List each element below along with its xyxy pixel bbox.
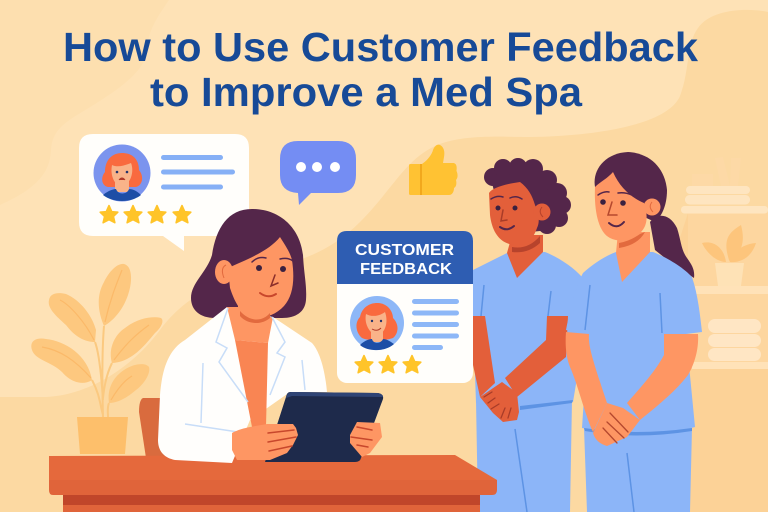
nurse with ponytail	[566, 152, 702, 512]
neck	[616, 232, 650, 282]
scrub top	[473, 252, 585, 410]
neck	[507, 235, 543, 278]
hair	[595, 152, 667, 222]
lab coat	[158, 307, 327, 463]
three star rating	[355, 356, 421, 373]
face	[595, 172, 647, 240]
arms	[566, 332, 607, 432]
neck and collar opening	[227, 298, 273, 343]
review text lines	[161, 155, 235, 190]
customer feedback card: CUSTOMER	[355, 242, 454, 259]
customer feedback card	[337, 231, 473, 383]
desk	[49, 455, 497, 512]
customer feedback card: FEEDBACK	[360, 261, 452, 278]
title	[63, 24, 698, 115]
scrub top	[566, 252, 702, 433]
arms	[473, 316, 495, 397]
curly hair	[484, 158, 571, 234]
review speech bubble	[79, 134, 249, 251]
feedback text lines	[412, 299, 459, 350]
face details	[491, 196, 522, 229]
face	[228, 237, 293, 318]
trousers	[476, 400, 572, 512]
doctor hair	[191, 209, 306, 318]
icon: thumbs up	[409, 145, 458, 195]
chair	[139, 398, 165, 458]
hands on tablet	[232, 424, 298, 460]
potted plant	[31, 264, 162, 454]
ear	[215, 260, 233, 284]
title: to Improve a Med Spa	[150, 69, 583, 115]
clasped hands	[593, 403, 640, 446]
doctor	[158, 209, 383, 463]
lapel lines	[185, 308, 305, 432]
four star rating	[100, 206, 191, 223]
undershirt	[235, 340, 268, 427]
tablet	[265, 392, 383, 462]
trousers	[584, 428, 692, 512]
avatar: happy customer	[350, 296, 404, 350]
chat bubble icon	[280, 141, 356, 205]
avatar: unhappy customer	[94, 144, 150, 202]
title: How to Use Customer Feedback	[63, 24, 698, 70]
clasped hands	[480, 382, 519, 422]
face details	[598, 192, 632, 226]
face	[489, 182, 539, 245]
eyes, brows, nose and smile	[252, 258, 293, 296]
background shelves	[681, 157, 768, 369]
ponytail	[650, 216, 694, 278]
nurse with curly hair	[473, 158, 585, 512]
